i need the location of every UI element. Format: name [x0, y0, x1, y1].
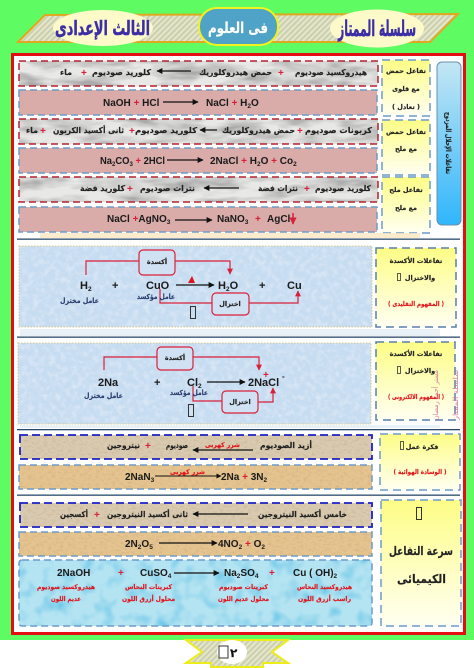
- reaction panel H2 + CuO: Cu: [287, 280, 302, 292]
- copper hydroxide panel: كبريتات النحاس: [125, 583, 172, 591]
- label: airbag: ( الوسادة الهوائية ): [394, 468, 447, 476]
- row 1 Arabic equation: ماء: [60, 68, 72, 77]
- reaction panel H2 + CuO: عامل مختزل: [60, 297, 99, 305]
- section: oxidation traditional concept: [19, 246, 456, 327]
- copper hydroxide panel: هيدروكسيد النحاس: [297, 583, 352, 591]
- row 5 Arabic equation: كلوريد فضة: [80, 184, 125, 193]
- airbag formula: [19, 465, 372, 489]
- airbag formula: 2NaN3: [125, 472, 155, 484]
- label: acid with alkali: [382, 60, 430, 116]
- row 5 Arabic equation: +: [127, 184, 133, 195]
- reaction panel H2 + CuO: اختزال: [219, 300, 241, 308]
- airbag formula: 2Na + 3N2: [221, 472, 268, 484]
- grade badge: الثالث الإعدادى: [55, 16, 150, 40]
- vertical category tab: تفاعلات الإحلال المزدوج: [444, 112, 452, 174]
- row 1 Arabic equation: [19, 61, 378, 86]
- row 2 formula: NaCl + H2O: [206, 98, 259, 110]
- row 5 Arabic equation: [19, 177, 378, 202]
- airbag Arabic equation: نيتروجين: [107, 441, 140, 450]
- vertical author credit: [431, 370, 460, 421]
- divider: [17, 238, 460, 240]
- reaction panel 2Na + Cl2: عامل مؤكسد: [170, 389, 208, 397]
- label: reaction rate: سرعة التفاعل: [389, 544, 453, 558]
- copper hydroxide panel: عديم اللون: [51, 595, 81, 603]
- copper hydroxide panel: +: [269, 568, 275, 579]
- label: electronic concept: والاختزال: [405, 367, 435, 375]
- label: acid with alkali: مع قلوى: [392, 85, 420, 93]
- row 3 Arabic equation: +: [129, 126, 135, 137]
- reaction panel 2Na + Cl2: عامل مختزل: [84, 392, 123, 400]
- row 2 formula: [19, 90, 377, 115]
- section: double displacement reactions: [19, 60, 461, 233]
- row 3 Arabic equation: كلوريد صوديوم: [135, 126, 197, 135]
- grade badge: [53, 10, 153, 46]
- reaction panel 2Na + Cl2: [18, 343, 371, 424]
- label: traditional concept: [376, 248, 456, 327]
- divider: [17, 336, 460, 338]
- label: electronic concept: ( المفهوم الالكترونى ): [388, 393, 444, 401]
- copper hydroxide panel: Na2SO4: [224, 568, 259, 580]
- airbag formula: شرر كهربى: [170, 468, 205, 476]
- N2O5 Arabic equation: ثانى أكسيد النيتروجين: [107, 509, 188, 519]
- vertical author credit: مستر أحمد رمضان: [431, 370, 440, 420]
- reaction panel 2Na + Cl2: أكسدة: [165, 353, 185, 362]
- row 4 formula: 2NaCl + H2O + Co2: [210, 156, 297, 168]
- section: airbag idea: [19, 434, 460, 490]
- subject badge: فى العلوم: [208, 19, 268, 37]
- N2O5 formula: [19, 532, 372, 556]
- reaction panel H2 + CuO: H2O: [218, 280, 239, 293]
- row 3 Arabic equation: حمض هيدروكلوريك: [222, 126, 295, 136]
- row 3 Arabic equation: كربونات صوديوم: [305, 126, 372, 135]
- label: reaction rate: [381, 500, 461, 626]
- row 1 Arabic equation: +: [81, 68, 87, 79]
- copper hydroxide panel: راسب أزرق اللون: [298, 594, 351, 603]
- header banner: [18, 8, 458, 48]
- watermark bands: [20, 233, 440, 428]
- label: acid with salt: [382, 120, 430, 175]
- label: traditional concept: والاختزال: [405, 274, 435, 282]
- row 6 formula: [19, 207, 377, 232]
- airbag Arabic equation: أزيد الصوديوم: [260, 440, 312, 450]
- copper hydroxide panel: 2NaOH: [57, 568, 90, 579]
- label: traditional concept: ( المفهوم التقليدى ): [388, 300, 444, 308]
- subject badge: [199, 8, 278, 45]
- label: salt with salt: [382, 177, 430, 233]
- label: electronic concept: [376, 342, 455, 420]
- row 3 Arabic equation: [19, 119, 378, 144]
- label: salt with salt: مع ملح: [395, 204, 417, 212]
- section: oxidation electronic concept: [18, 342, 460, 424]
- reaction panel 2Na + Cl2: 2NaCl: [248, 377, 279, 389]
- N2O5 Arabic equation: خامس أكسيد النيتروجين: [258, 509, 347, 520]
- label: airbag: [380, 434, 460, 490]
- row 4 formula: [19, 148, 377, 173]
- airbag Arabic equation: [20, 435, 372, 459]
- airbag Arabic equation: صوديوم: [166, 441, 188, 450]
- section: reaction rate: [19, 500, 461, 626]
- copper hydroxide panel: محلول عديم اللون: [218, 595, 269, 603]
- row 3 Arabic equation: +: [297, 126, 303, 137]
- vertical category tab: [437, 62, 461, 225]
- row 1 Arabic equation: هيدروكسيد صوديوم: [295, 68, 367, 77]
- page number ribbon: ٢: [230, 646, 238, 660]
- airbag Arabic equation: شرر كهربى: [205, 441, 240, 449]
- row 6 formula: NaNO3: [217, 214, 249, 226]
- label: electronic concept: تفاعلات الأكسدة: [390, 349, 442, 358]
- row 6 formula: NaCl +AgNO3: [107, 214, 171, 226]
- row 5 Arabic equation: كلوريد صوديوم: [315, 184, 371, 193]
- reaction panel H2 + CuO: H2: [80, 280, 92, 293]
- vertical author credit: سلسلة الممتاز: [452, 370, 460, 421]
- row 3 Arabic equation: ماء: [26, 126, 38, 135]
- row 6 formula: +: [255, 214, 261, 225]
- N2O5 formula: 2N2O5: [125, 539, 153, 551]
- copper hydroxide panel: Cu ( OH)2: [293, 568, 338, 580]
- N2O5 Arabic equation: +: [94, 510, 100, 521]
- row 2 formula: NaOH + HCl: [103, 98, 160, 109]
- row 5 Arabic equation: نترات فضة: [258, 184, 298, 193]
- reaction panel H2 + CuO: [19, 246, 372, 327]
- label: acid with alkali: تفاعل حمض: [386, 67, 426, 75]
- row 1 Arabic equation: حمض هيدروكلوريك: [199, 68, 272, 78]
- copper hydroxide panel: محلول أزرق اللون: [122, 594, 175, 603]
- N2O5 formula: 4NO2 + O2: [218, 539, 265, 551]
- copper hydroxide panel: +: [118, 568, 124, 579]
- label: traditional concept: تفاعلات الأكسدة: [390, 256, 442, 265]
- row 1 Arabic equation: كلوريد صوديوم: [92, 68, 151, 77]
- row 3 Arabic equation: +: [40, 126, 46, 137]
- reaction panel 2Na + Cl2: +: [154, 377, 160, 389]
- copper hydroxide panel: [19, 560, 372, 626]
- reaction panel 2Na + Cl2: +: [263, 370, 269, 381]
- row 1 Arabic equation: +: [278, 68, 284, 79]
- header ribbon: [18, 14, 458, 42]
- label: acid with salt: تفاعل حمض: [386, 128, 426, 136]
- reaction panel H2 + CuO: +: [112, 280, 118, 292]
- row 6 formula: AgCl: [267, 214, 291, 225]
- copper hydroxide panel: كبريتات صوديوم: [219, 583, 268, 591]
- reaction panel 2Na + Cl2: 2Na: [98, 377, 119, 389]
- label: acid with alkali: ( تعادل ): [392, 103, 420, 111]
- airbag Arabic equation: +: [145, 441, 151, 452]
- divider: [17, 494, 460, 496]
- label: airbag: فكرة عمل: [406, 443, 438, 451]
- reaction panel H2 + CuO: CuO: [146, 280, 170, 292]
- reaction panel H2 + CuO: أكسدة: [147, 257, 167, 266]
- label: acid with salt: مع ملح: [395, 145, 417, 153]
- page number ribbon: [186, 640, 288, 667]
- row 5 Arabic equation: +: [304, 184, 310, 195]
- N2O5 Arabic equation: [20, 503, 372, 527]
- reaction panel H2 + CuO: +: [259, 280, 265, 292]
- copper hydroxide panel: CuSO4: [140, 568, 172, 580]
- series title badge: [330, 10, 424, 48]
- reaction panel 2Na + Cl2: Cl2: [187, 377, 202, 390]
- reaction panel H2 + CuO: عامل مؤكسد: [137, 293, 175, 301]
- label: salt with salt: تفاعل ملح: [389, 186, 423, 194]
- row 4 formula: Na2CO3 + 2HCl: [100, 156, 165, 168]
- reaction panel 2Na + Cl2: اختزال: [229, 398, 251, 406]
- N2O5 Arabic equation: أكسجين: [60, 509, 88, 519]
- row 5 Arabic equation: نترات صوديوم: [140, 184, 195, 193]
- reaction panel 2Na + Cl2: -: [282, 372, 285, 381]
- row 3 Arabic equation: ثانى أكسيد الكربون: [53, 125, 124, 135]
- label: reaction rate: الكيميائى: [397, 572, 446, 586]
- divider: [17, 429, 460, 430]
- copper hydroxide panel: هيدروكسيد صوديوم: [37, 583, 95, 591]
